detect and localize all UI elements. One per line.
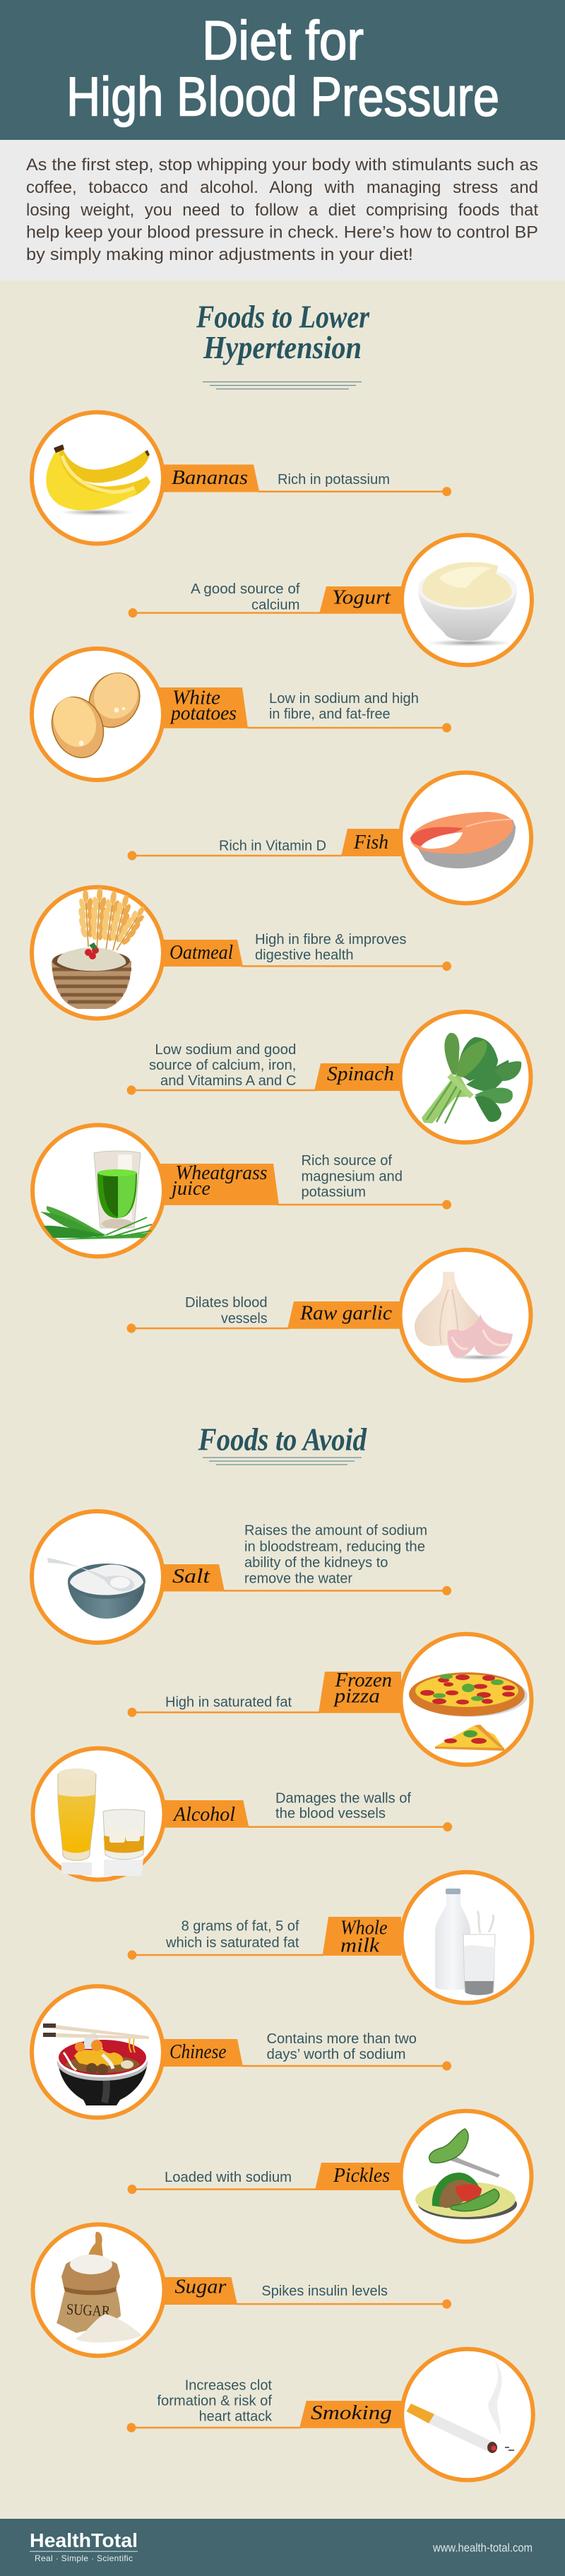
description: salt — [244, 1523, 427, 1587]
label: salt: Salt — [172, 1565, 210, 1588]
icon: salt bowl — [47, 1558, 145, 1619]
description: salt: remove the water — [244, 1571, 352, 1587]
description: raw garlic — [185, 1295, 268, 1327]
title — [66, 9, 499, 127]
label: whole milk — [340, 1916, 388, 1957]
label: sugar: Sugar — [174, 2276, 227, 2298]
label: wheatgrass juice — [169, 1162, 267, 1200]
description: smoking: Increases clot — [185, 2378, 272, 2394]
label: wheatgrass juice: Wheatgrass — [175, 1162, 267, 1184]
intro text: losing weight, you need to follow a diet comprising foods that — [26, 201, 538, 220]
panel: white potatoes — [32, 649, 451, 780]
panel: spinach — [127, 1012, 531, 1142]
icon: potatoes — [43, 663, 150, 765]
panel: raw garlic — [127, 1250, 531, 1381]
description: oatmeal: High in fibre & improves — [255, 932, 407, 947]
description: spinach — [149, 1042, 296, 1089]
heading: foods to lower hypertension — [196, 298, 370, 389]
intro text: As the first step, stop whipping your body with stimulants such as — [26, 155, 538, 175]
intro text: by simply making minor adjustments in your diet! — [26, 245, 413, 264]
description: salt: Raises the amount of sodium — [244, 1523, 427, 1539]
icon: noodle bowl — [43, 2023, 149, 2105]
intro panel — [0, 140, 565, 280]
panel: bananas — [32, 413, 451, 544]
label: bananas: Bananas — [172, 466, 248, 489]
label: pickles: Pickles — [333, 2164, 390, 2187]
description: raw garlic: vessels — [221, 1311, 268, 1327]
label: white potatoes: potatoes — [170, 702, 237, 725]
label: chinese: Chinese — [170, 2040, 227, 2063]
heading: foods to avoid: Foods to Avoid — [198, 1422, 367, 1457]
label: wheatgrass juice: juice — [169, 1177, 210, 1200]
header banner — [0, 0, 565, 140]
intro text — [26, 155, 538, 264]
description: pickles: Loaded with sodium — [165, 2170, 292, 2185]
heading: foods to lower hypertension: Foods to Lower — [196, 298, 370, 335]
icon: milk bottle and glass — [435, 1889, 495, 1995]
panel: sugar — [32, 2224, 451, 2356]
description: chinese: days’ worth of sodium — [267, 2047, 405, 2062]
panel: alcohol — [32, 1748, 452, 1879]
description: smoking: formation & risk of — [157, 2394, 272, 2409]
heading: foods to lower hypertension: Hypertension — [203, 329, 362, 365]
description: frozen pizza: High in saturated fat — [165, 1694, 292, 1710]
label: alcohol: Alcohol — [172, 1803, 235, 1826]
description: fish: Rich in Vitamin D — [219, 839, 326, 854]
intro text: help keep your blood pressure in check. Here’s how to control BP — [26, 223, 538, 242]
icon: cigarette — [407, 2360, 514, 2453]
panel: whole milk — [128, 1872, 533, 2003]
description: alcohol: the blood vessels — [275, 1806, 386, 1821]
label: white potatoes — [170, 686, 237, 725]
description: wheatgrass juice — [301, 1153, 403, 1200]
description: smoking: heart attack — [199, 2409, 273, 2425]
panel: pickles — [128, 2111, 532, 2242]
icon: pizza — [409, 1672, 528, 1751]
description: alcohol: Damages the walls of — [275, 1790, 411, 1806]
title: High Blood Pressure — [66, 65, 499, 127]
description: smoking — [157, 2378, 273, 2425]
icon: yogurt bowl — [418, 562, 517, 646]
label: yogurt: Yogurt — [332, 586, 391, 609]
logo: health total — [30, 2529, 138, 2563]
description: wheatgrass juice: magnesium and — [301, 1169, 403, 1184]
description: oatmeal: digestive health — [255, 947, 353, 963]
description: oatmeal — [255, 932, 407, 963]
logo: health total: HealthTotal — [30, 2529, 138, 2551]
label: frozen pizza — [333, 1669, 392, 1708]
description: white potatoes: Low in sodium and high — [269, 691, 419, 707]
icon: beer and whisky — [58, 1768, 145, 1876]
panel: wheatgrass juice — [32, 1125, 451, 1256]
icon: wheatgrass glass — [40, 1151, 152, 1240]
description: salt: in bloodstream, reducing the — [244, 1539, 425, 1554]
label: smoking: Smoking — [311, 2401, 392, 2424]
description: spinach: and Vitamins A and C — [160, 1073, 296, 1089]
icon: salmon steak — [410, 812, 516, 868]
icon: bananas — [46, 444, 150, 516]
description: white potatoes — [269, 691, 419, 722]
panel: chinese — [32, 1986, 451, 2117]
description: yogurt: A good source of — [191, 581, 300, 597]
panel: frozen pizza — [128, 1634, 532, 1765]
icon: spinach bunch — [422, 1033, 521, 1123]
panel: salt — [32, 1511, 451, 1643]
description: whole milk — [165, 1919, 299, 1951]
icon: pickles on plate — [415, 2129, 517, 2219]
description: whole milk: which is saturated fat — [165, 1935, 299, 1951]
panel: oatmeal — [32, 887, 451, 1019]
description: white potatoes: in fibre, and fat-free — [269, 707, 390, 722]
footer — [0, 2519, 565, 2576]
label: fish: Fish — [353, 831, 388, 853]
description: raw garlic: Dilates blood — [185, 1295, 268, 1311]
label: frozen pizza: pizza — [333, 1685, 380, 1708]
description: yogurt: calcium — [251, 598, 299, 613]
label: white potatoes: White — [172, 686, 220, 709]
description: chinese — [267, 2031, 417, 2062]
description: salt: ability of the kidneys to — [244, 1555, 388, 1571]
website url: www.health-total.com — [432, 2541, 533, 2555]
description: wheatgrass juice: potassium — [301, 1185, 366, 1200]
description: whole milk: 8 grams of fat, 5 of — [182, 1919, 299, 1934]
label: spinach: Spinach — [327, 1063, 394, 1085]
description: yogurt — [191, 581, 300, 613]
icon: sugar sack: SUGAR — [66, 2300, 111, 2320]
description: spinach: Low sodium and good — [155, 1042, 296, 1058]
panel: yogurt — [129, 535, 532, 665]
panel: fish — [128, 773, 531, 903]
description: wheatgrass juice: Rich source of — [301, 1153, 392, 1169]
panel: smoking — [127, 2349, 533, 2480]
description: sugar: Spikes insulin levels — [261, 2283, 388, 2299]
description: bananas: Rich in potassium — [278, 472, 390, 488]
logo: health total: Real · Simple · Scientific — [35, 2553, 133, 2563]
intro text: coffee, tobacco and alcohol. Along with managing stress and — [26, 178, 538, 197]
description: chinese: Contains more than two — [267, 2031, 417, 2047]
icon: garlic — [415, 1272, 513, 1360]
icon: oatmeal bowl — [52, 887, 150, 1009]
label: whole milk: milk — [340, 1934, 380, 1957]
title: Diet for — [202, 9, 364, 71]
label: raw garlic: Raw garlic — [299, 1301, 392, 1324]
icon: sugar sack — [56, 2232, 141, 2342]
label: whole milk: Whole — [340, 1916, 388, 1939]
description: alcohol — [275, 1790, 411, 1821]
label: oatmeal: Oatmeal — [170, 941, 233, 964]
label: frozen pizza: Frozen — [335, 1669, 392, 1691]
description: spinach: source of calcium, iron, — [149, 1058, 296, 1073]
